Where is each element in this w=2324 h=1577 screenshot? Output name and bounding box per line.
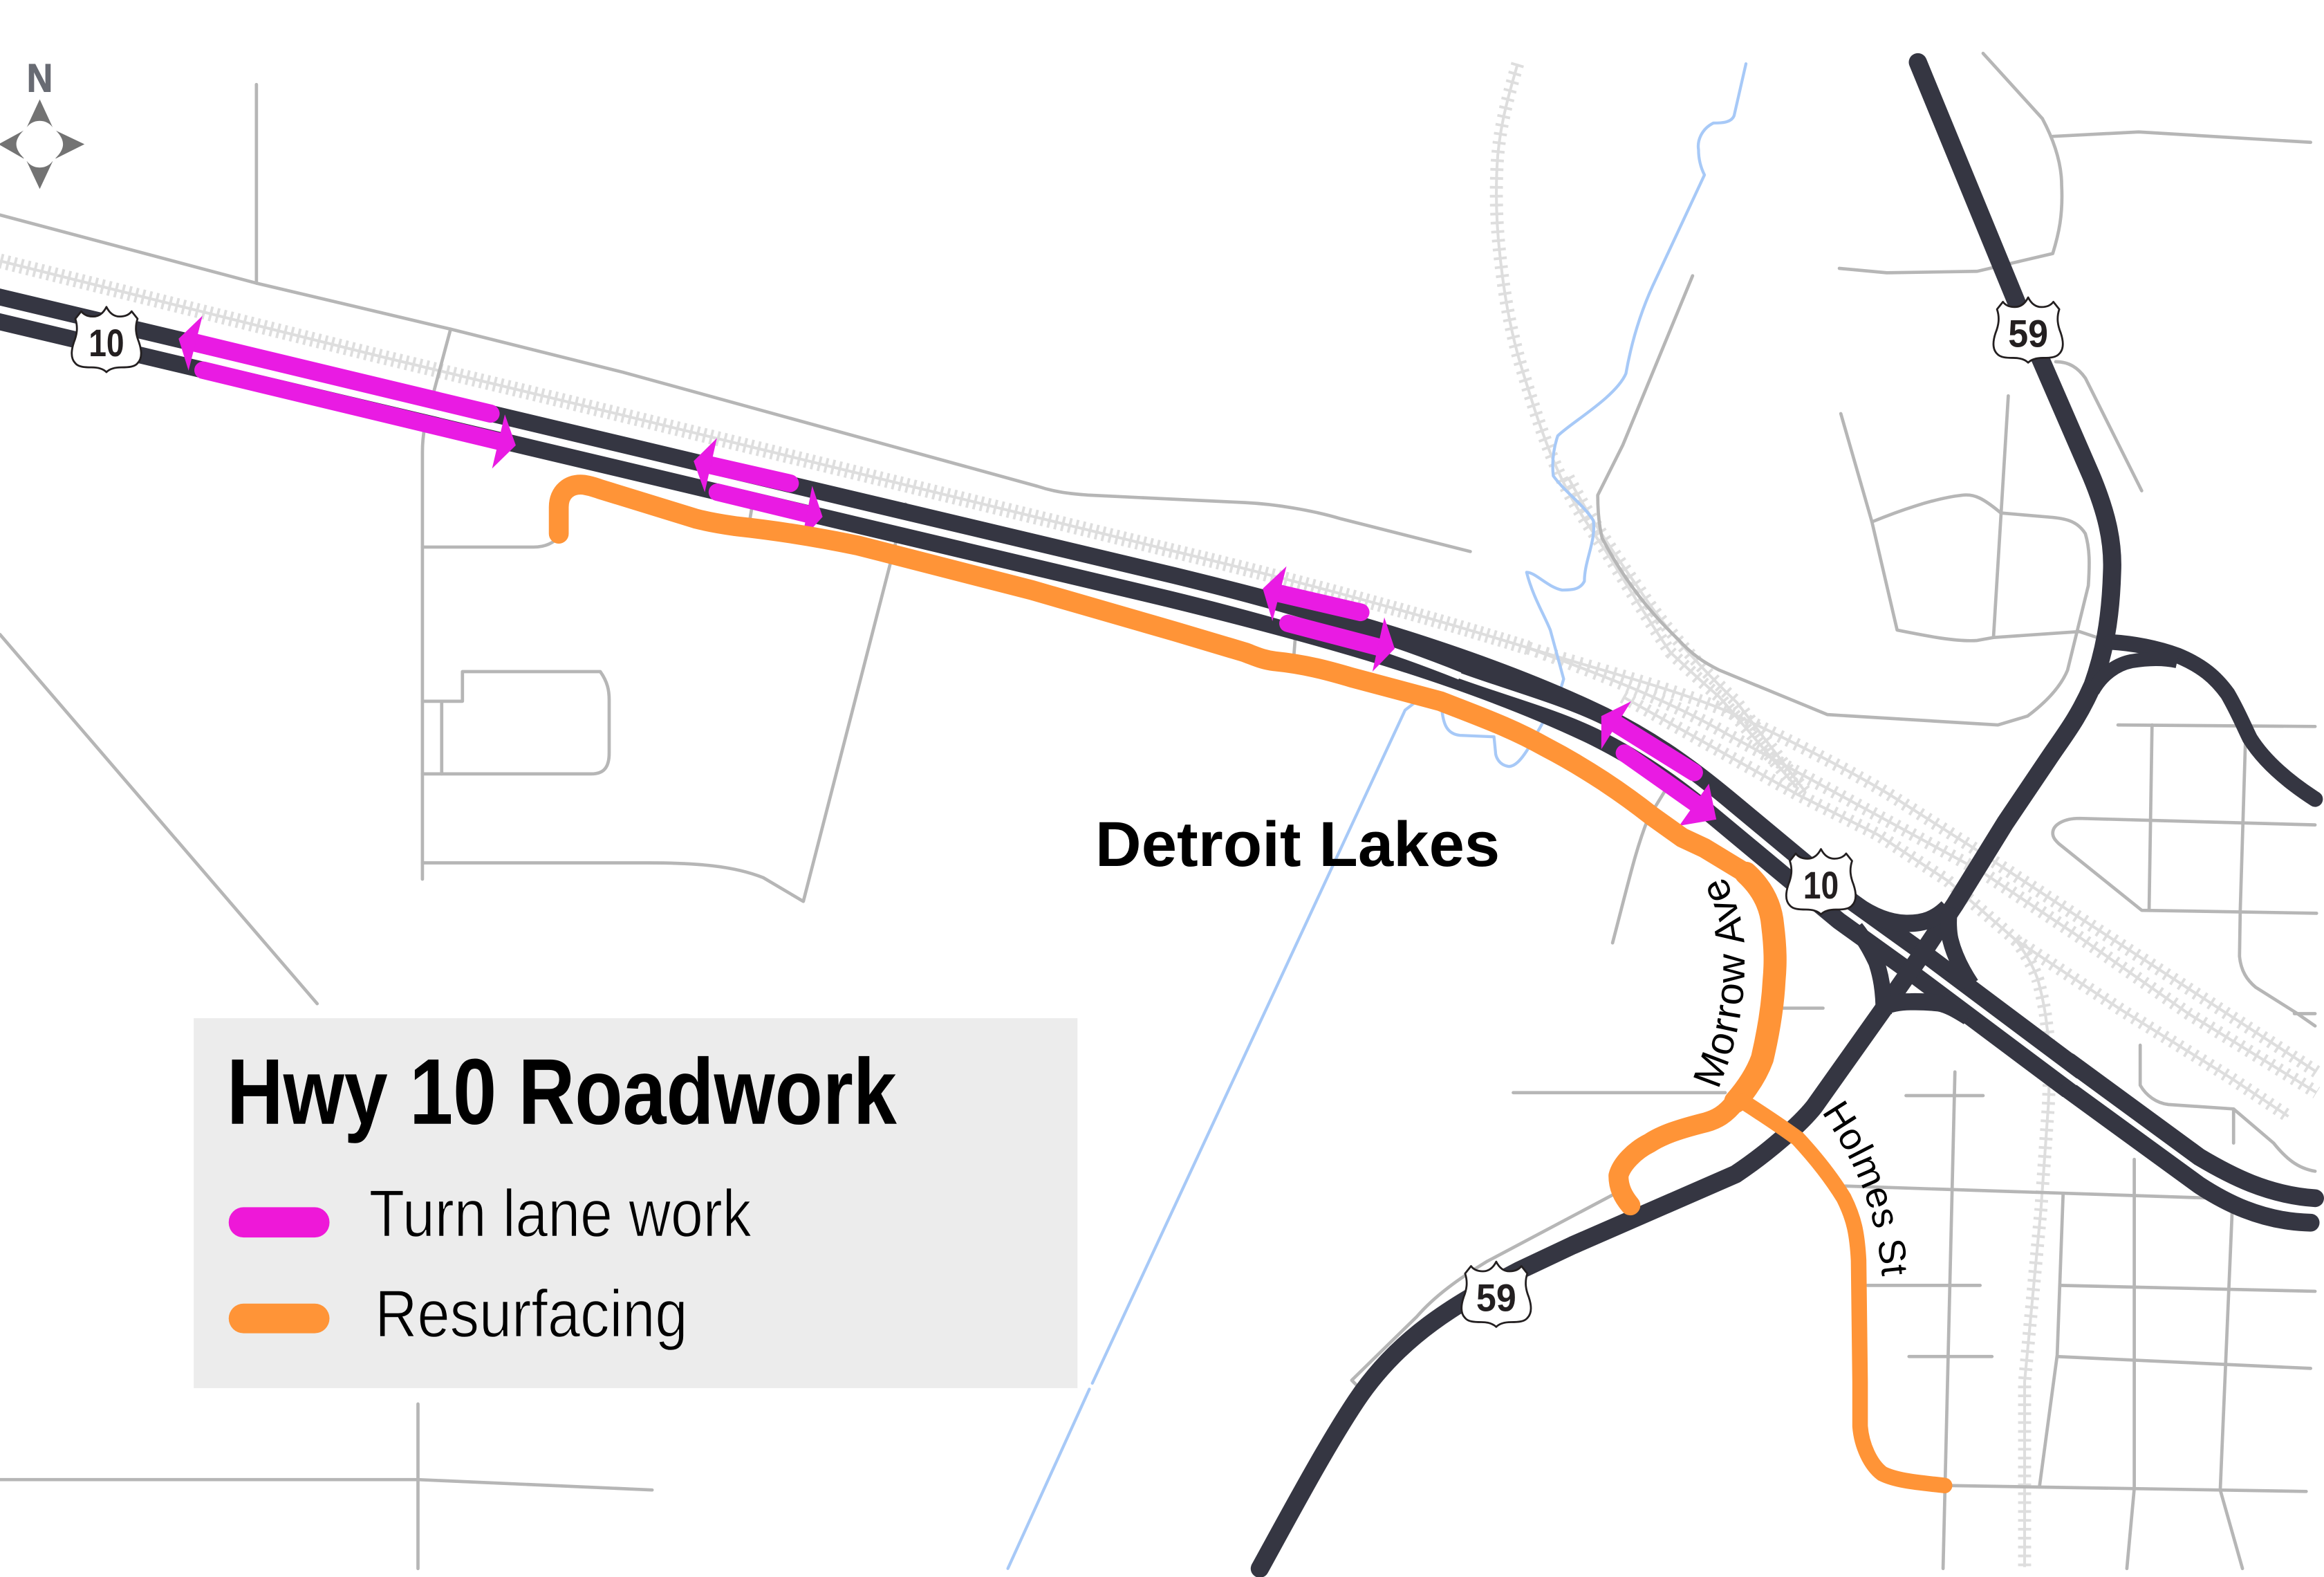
shield: US 10 east bbox=[1786, 849, 1856, 914]
street label: Morrow Ave: Morrow Ave bbox=[1693, 880, 1745, 1087]
shield: US 10 east: 10 bbox=[1803, 864, 1839, 907]
shield: US 59 north: 59 bbox=[2008, 312, 2048, 355]
street label: Holmes St: Holmes St bbox=[1823, 1100, 1906, 1277]
shield: US 59 south: 59 bbox=[1476, 1276, 1516, 1319]
arrow pair 3 bbox=[1263, 566, 1395, 672]
highway 10 mainline bbox=[0, 302, 2315, 1223]
arrow pair 2 bbox=[694, 438, 823, 540]
resurfacing routes bbox=[559, 485, 1944, 1486]
legend label: resurfacing: Resurfacing bbox=[375, 1277, 688, 1351]
icon: north arrow compass: N bbox=[27, 56, 53, 100]
panel: legend bbox=[194, 1018, 1077, 1388]
icon: north arrow compass bbox=[0, 56, 84, 189]
rivers bbox=[1008, 64, 1746, 1569]
shield: US 10 west bbox=[72, 307, 141, 372]
legend swatch: resurfacing bbox=[229, 1304, 330, 1334]
shield: US 59 north bbox=[1993, 297, 2063, 362]
street label: Morrow Ave bbox=[1693, 880, 1745, 1087]
arrow pair 4 bbox=[1601, 701, 1716, 826]
shield: US 59 south bbox=[1462, 1262, 1531, 1327]
legend swatch: turn lane work bbox=[229, 1207, 330, 1237]
legend label: turn lane work: Turn lane work bbox=[369, 1177, 752, 1251]
legend heading: Hwy 10 Roadwork bbox=[227, 1040, 898, 1144]
shield: US 10 west: 10 bbox=[89, 322, 124, 365]
arrow pair 1 bbox=[178, 316, 516, 468]
highway 59 and interchange ramps bbox=[1260, 62, 2315, 1569]
city label: Detroit Lakes: Detroit Lakes bbox=[1095, 809, 1500, 880]
turn lane work arrows bbox=[178, 316, 1716, 826]
